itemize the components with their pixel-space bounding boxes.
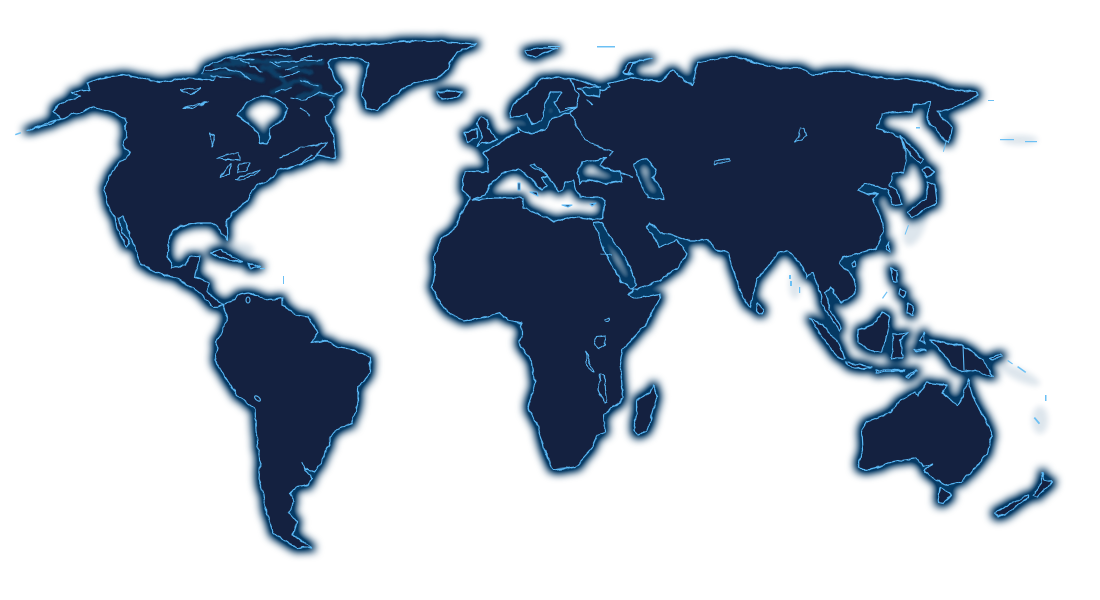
St Lawrence and Newfoundland outlines [280,142,328,165]
Iceland [437,91,462,99]
Americas and Greenland [27,41,477,548]
Tasmania [938,487,952,503]
Caribbean islands [210,250,260,268]
Asian lakes and borders [565,78,806,255]
Madagascar [633,385,657,435]
Japan and Sakhalin [900,135,937,218]
land masses with glow [27,41,1052,548]
small Pacific and Arctic islets [15,46,1046,424]
Taiwan and Hainan [851,242,890,267]
Svalbard [525,48,557,57]
Arctic channels [205,54,335,115]
New Guinea [930,340,993,377]
Great Lakes [217,152,260,180]
South American lakes [246,297,261,402]
Mediterranean islands [518,183,596,207]
faint glow around small islands [226,135,1048,434]
New Britain [990,354,1003,360]
Canadian lakes [180,88,215,146]
Sri Lanka [757,302,763,314]
Africa and Eurasia [432,56,978,470]
New Zealand [995,472,1052,516]
Novaya Zemlya [623,58,652,75]
Philippines [891,268,913,315]
New Guinea border [963,345,964,370]
Australia [858,380,992,485]
Britain and Ireland [465,118,498,147]
Indonesia [810,312,926,378]
African lakes [586,318,610,403]
